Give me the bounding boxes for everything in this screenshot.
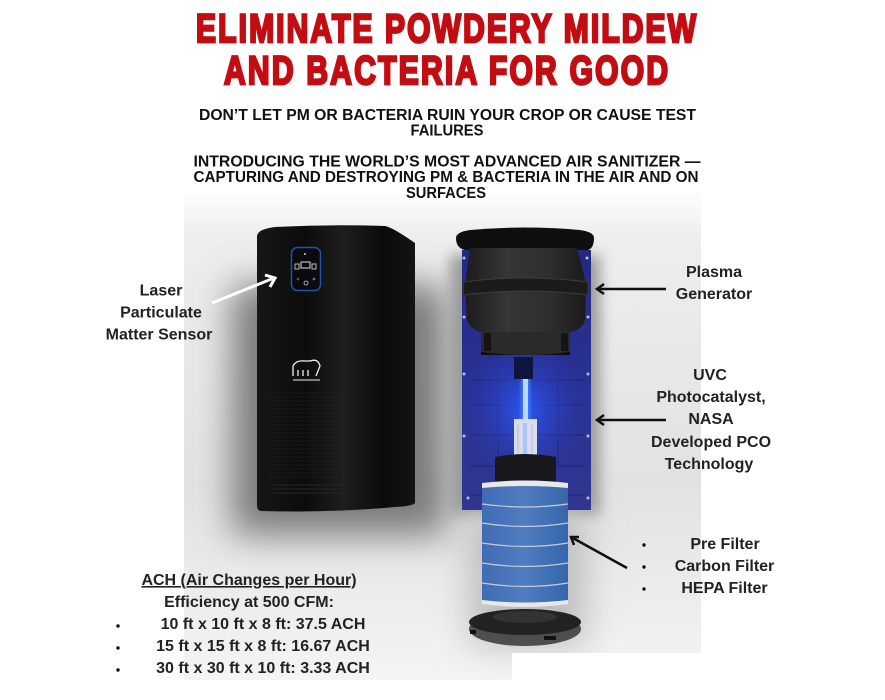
subheading: crop warning: DON’T LET PM OR BACTERIA RUIN YOUR CROP OR CAUSE TEST (199, 107, 696, 124)
arrow: filter (571, 537, 627, 568)
white bottom-right cutout (512, 654, 701, 684)
label: UVC photocatalyst: Technology (665, 456, 753, 473)
plasma generator motor (456, 228, 594, 379)
title: AND BACTERIA FOR GOOD (224, 49, 668, 93)
label: laser sensor: Matter Sensor (106, 326, 212, 344)
subheading: introduction: CAPTURING AND DESTROYING PM & BACTERIA IN THE AIR AND ON (194, 169, 698, 186)
label: UVC photocatalyst: UVC (693, 367, 727, 384)
arrow: UVC photocatalyst (597, 415, 666, 425)
label: filter types: HEPA Filter (681, 580, 768, 597)
arrow: plasma generator (597, 284, 666, 294)
label: filter types: Pre Filter (690, 536, 760, 553)
title: ELIMINATE POWDERY MILDEW (196, 7, 697, 51)
subheading: crop warning: FAILURES (410, 122, 484, 140)
title (196, 7, 697, 93)
label: filter types (642, 536, 774, 597)
label: filter types: Carbon Filter (675, 558, 774, 575)
subheading: crop warning (199, 107, 696, 140)
ACH efficiency list (116, 572, 370, 677)
exploded view: back panel (462, 250, 591, 510)
ACH efficiency list: Efficiency at 500 CFM: (164, 594, 334, 611)
photocatalyst cartridge (514, 419, 537, 455)
label: plasma generator: Plasma (686, 264, 742, 281)
filter base (469, 609, 581, 646)
label: UVC photocatalyst: Photocatalyst, (656, 389, 766, 406)
logo (293, 360, 320, 380)
UVC lamp glow (467, 340, 583, 480)
photo backdrop (184, 190, 701, 680)
control display (292, 248, 320, 290)
label: UVC photocatalyst: Developed PCO (651, 434, 771, 451)
subheading: introduction: INTRODUCING THE WORLD’S MOST ADVANCED AIR SANITIZER — (194, 154, 700, 170)
subheading: introduction (194, 154, 700, 202)
ACH efficiency list: 30 ft x 30 ft x 10 ft: 3.33 ACH (156, 660, 370, 677)
subheading: introduction: SURFACES (406, 185, 486, 202)
label: UVC photocatalyst: NASA (688, 411, 734, 428)
ACH efficiency list: 15 ft x 15 ft x 8 ft: 16.67 ACH (156, 638, 370, 655)
label: laser sensor: Laser (140, 282, 182, 300)
ACH efficiency list: 10 ft x 10 ft x 8 ft: 37.5 ACH (161, 616, 365, 633)
filter collar (495, 454, 556, 484)
ACH efficiency list: ACH (Air Changes per Hour) (141, 572, 357, 589)
label: laser sensor (106, 282, 212, 344)
intake grille (269, 393, 347, 477)
air purifier, assembled (257, 225, 415, 511)
label: laser sensor: Particulate (120, 304, 202, 322)
label: plasma generator (676, 264, 752, 303)
label: plasma generator: Generator (676, 286, 752, 303)
arrow: laser sensor (212, 275, 275, 303)
label: UVC photocatalyst (651, 367, 771, 473)
cylindrical blue filter (482, 480, 568, 607)
